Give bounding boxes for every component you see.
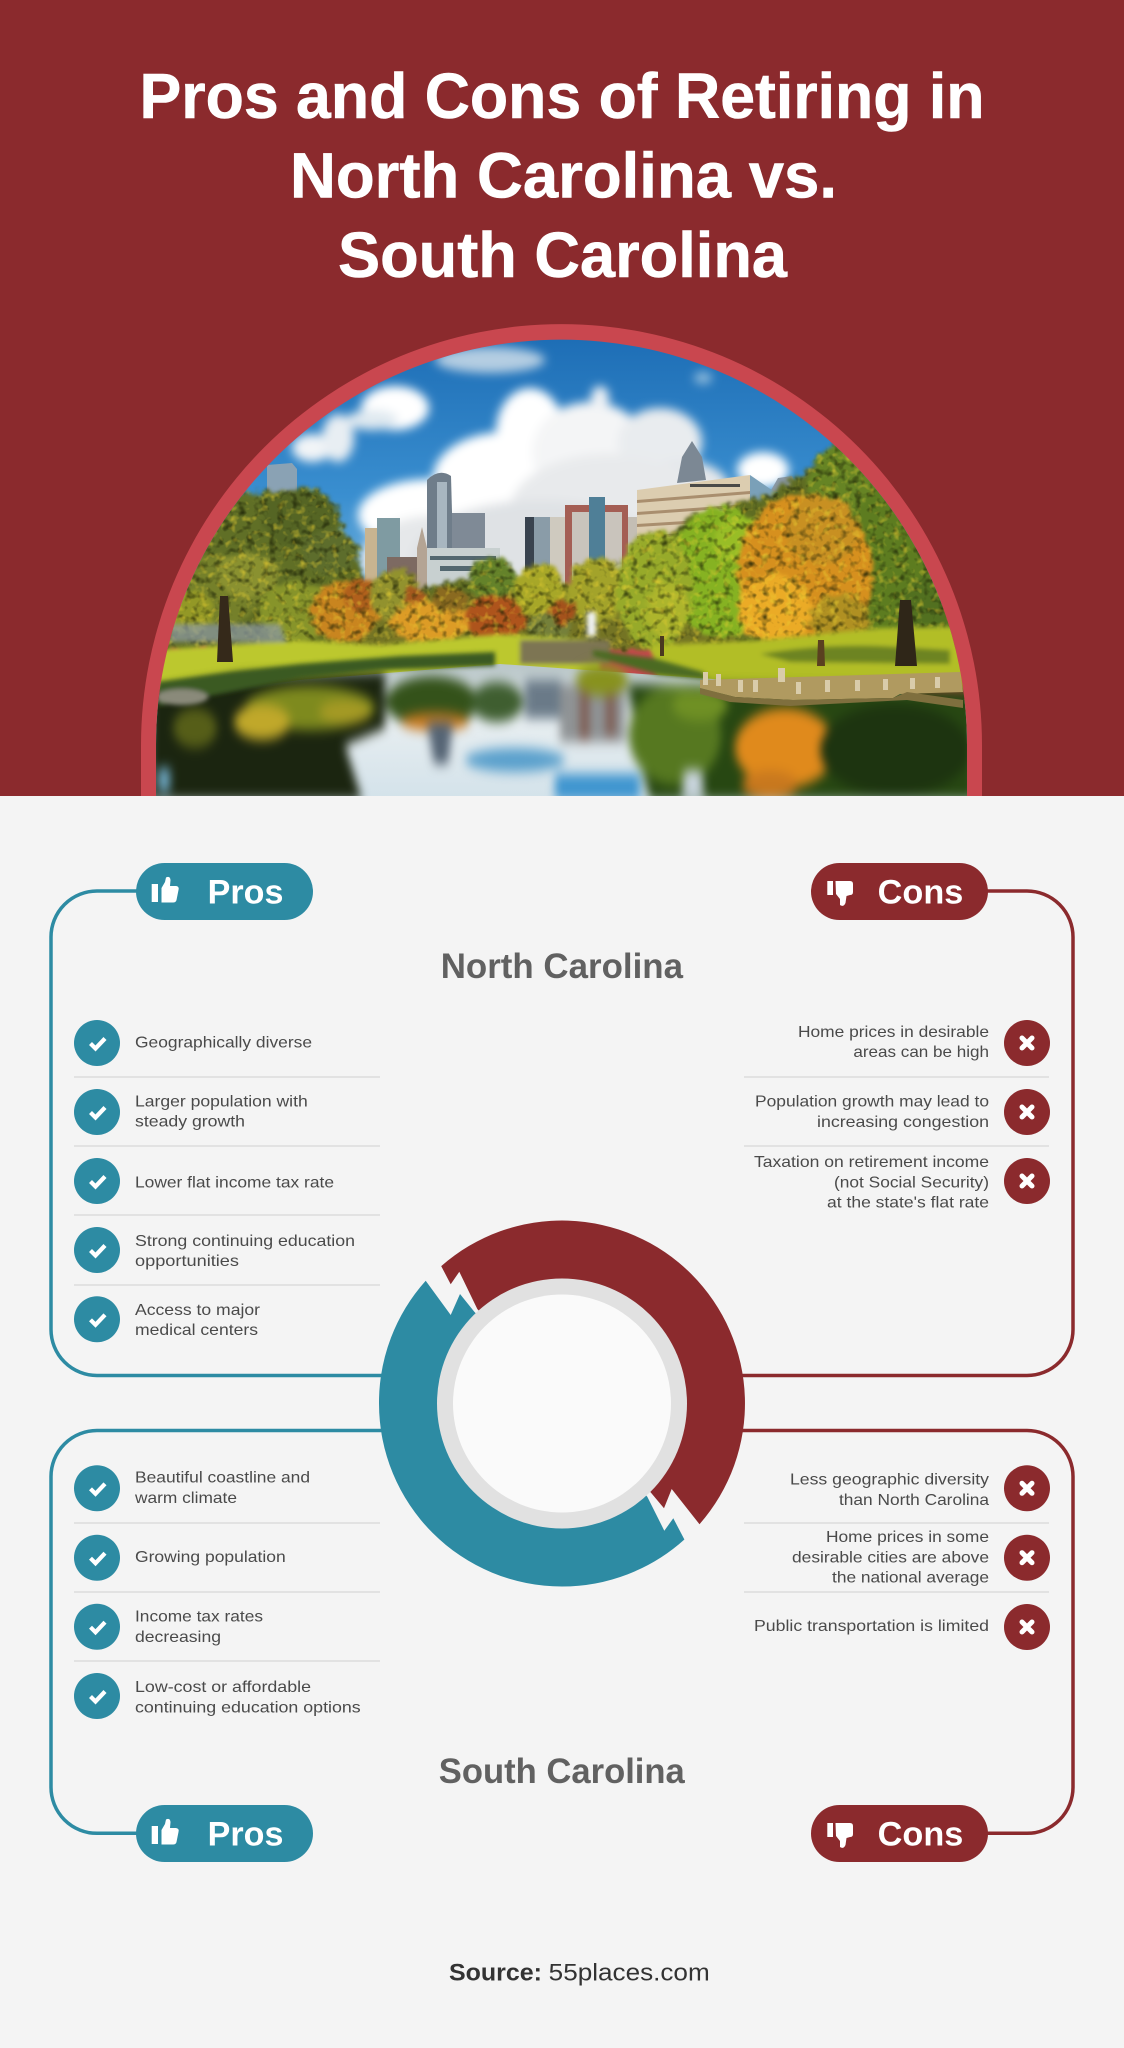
title: Pros and Cons of Retiring in bbox=[140, 60, 984, 132]
outline: SC cons bbox=[740, 1430, 1073, 1833]
park ground bbox=[150, 612, 975, 690]
segment: pros (teal) bbox=[379, 1281, 684, 1586]
item: medical centers: medical centers bbox=[135, 1322, 258, 1339]
item: home prices above average bbox=[792, 1529, 1050, 1587]
inner white disc bbox=[453, 1294, 671, 1512]
arch frame bbox=[141, 324, 982, 796]
item: home prices above average: the national average bbox=[832, 1570, 989, 1587]
panel: South Carolina pros bbox=[51, 1430, 385, 1862]
photo: Charlotte skyline and park pond bbox=[150, 335, 975, 800]
outline: NC pros bbox=[51, 891, 385, 1376]
item: coastline bbox=[74, 1465, 310, 1511]
item: medical centers bbox=[74, 1296, 261, 1342]
panel: South Carolina cons bbox=[740, 1430, 1073, 1862]
item: larger population: steady growth bbox=[135, 1114, 245, 1131]
header panel bbox=[0, 0, 1124, 800]
item: coastline: warm climate bbox=[134, 1490, 237, 1507]
title bbox=[140, 60, 984, 291]
panel: North Carolina pros bbox=[51, 863, 385, 1376]
icon: thumbs down bbox=[827, 881, 853, 906]
icon: thumbs up bbox=[152, 877, 179, 902]
item: education options bbox=[74, 1673, 361, 1719]
item: public transportation: Public transportation is limited bbox=[754, 1618, 989, 1635]
item: home prices: Home prices in desirable bbox=[798, 1024, 989, 1041]
title: South Carolina bbox=[338, 219, 787, 291]
source line bbox=[449, 1960, 710, 1987]
source line: 55places.com bbox=[549, 1960, 710, 1987]
center donut bbox=[379, 1221, 745, 1586]
item: less diversity: than North Carolina bbox=[839, 1492, 989, 1509]
item: geographically diverse: Geographically diverse bbox=[135, 1034, 312, 1052]
item: congestion: increasing congestion bbox=[817, 1114, 989, 1131]
item: home prices bbox=[798, 1020, 1050, 1066]
item: income tax rates bbox=[74, 1604, 263, 1650]
item: income tax rates: Income tax rates bbox=[135, 1609, 263, 1626]
item: lower flat income tax bbox=[74, 1158, 334, 1204]
title: North Carolina vs. bbox=[290, 140, 837, 212]
trees bbox=[150, 440, 975, 650]
item: less diversity bbox=[790, 1465, 1050, 1511]
pill: Pros bbox=[136, 1805, 313, 1862]
item: congestion bbox=[755, 1089, 1050, 1135]
inner grey ring bbox=[437, 1278, 687, 1528]
item: larger population: Larger population with bbox=[135, 1094, 308, 1111]
item: congestion: Population growth may lead to bbox=[755, 1094, 989, 1111]
item: income tax rates: decreasing bbox=[135, 1629, 221, 1646]
buildings bbox=[267, 441, 800, 596]
item: medical centers: Access to major bbox=[135, 1302, 261, 1319]
item: taxation: Taxation on retirement income bbox=[754, 1154, 989, 1171]
item: geographically diverse bbox=[74, 1020, 312, 1066]
item: public transportation bbox=[754, 1604, 1050, 1650]
item: education options: continuing education options bbox=[135, 1700, 361, 1717]
item: taxation bbox=[754, 1154, 1050, 1212]
outline: NC cons bbox=[740, 891, 1073, 1376]
source line: Source: bbox=[449, 1960, 542, 1987]
item: taxation: at the state's flat rate bbox=[827, 1195, 989, 1212]
heading: North Carolina: North Carolina bbox=[441, 947, 684, 986]
pill: Cons bbox=[811, 863, 988, 920]
icon: thumbs up bbox=[152, 1819, 179, 1844]
item: continuing education bbox=[74, 1227, 355, 1273]
item: home prices above average: desirable cities are above bbox=[792, 1549, 989, 1566]
pill: Cons: Cons bbox=[878, 873, 963, 911]
item: home prices: areas can be high bbox=[853, 1044, 989, 1061]
outline: SC pros bbox=[51, 1430, 385, 1833]
item: lower flat income tax: Lower flat income tax rate bbox=[135, 1175, 334, 1192]
item: larger population bbox=[74, 1089, 308, 1135]
segment: cons (red) bbox=[441, 1221, 745, 1524]
tree trunks bbox=[217, 596, 917, 666]
pill: Cons: Cons bbox=[878, 1816, 963, 1854]
heading: South Carolina: South Carolina bbox=[439, 1752, 685, 1791]
pill: Pros: Pros bbox=[208, 1816, 283, 1854]
item: growing population: Growing population bbox=[135, 1549, 286, 1566]
item: growing population bbox=[74, 1535, 286, 1581]
item: education options: Low-cost or affordable bbox=[135, 1679, 311, 1696]
panel: North Carolina cons bbox=[740, 863, 1073, 1376]
pill: Pros: Pros bbox=[208, 873, 283, 911]
item: home prices above average: Home prices in some bbox=[826, 1529, 989, 1546]
item: taxation: (not Social Security) bbox=[834, 1175, 989, 1192]
pond reflections bbox=[150, 664, 975, 800]
icon: thumbs down bbox=[827, 1823, 853, 1848]
bushes and rocks bbox=[156, 650, 708, 706]
item: continuing education: Strong continuing education bbox=[135, 1233, 355, 1250]
wooden deck bbox=[700, 668, 963, 708]
pond water bbox=[150, 664, 975, 800]
pill: Cons bbox=[811, 1805, 988, 1862]
item: continuing education: opportunities bbox=[135, 1253, 239, 1270]
item: coastline: Beautiful coastline and bbox=[135, 1470, 310, 1487]
item: less diversity: Less geographic diversity bbox=[790, 1472, 989, 1489]
pill: Pros bbox=[136, 863, 313, 920]
